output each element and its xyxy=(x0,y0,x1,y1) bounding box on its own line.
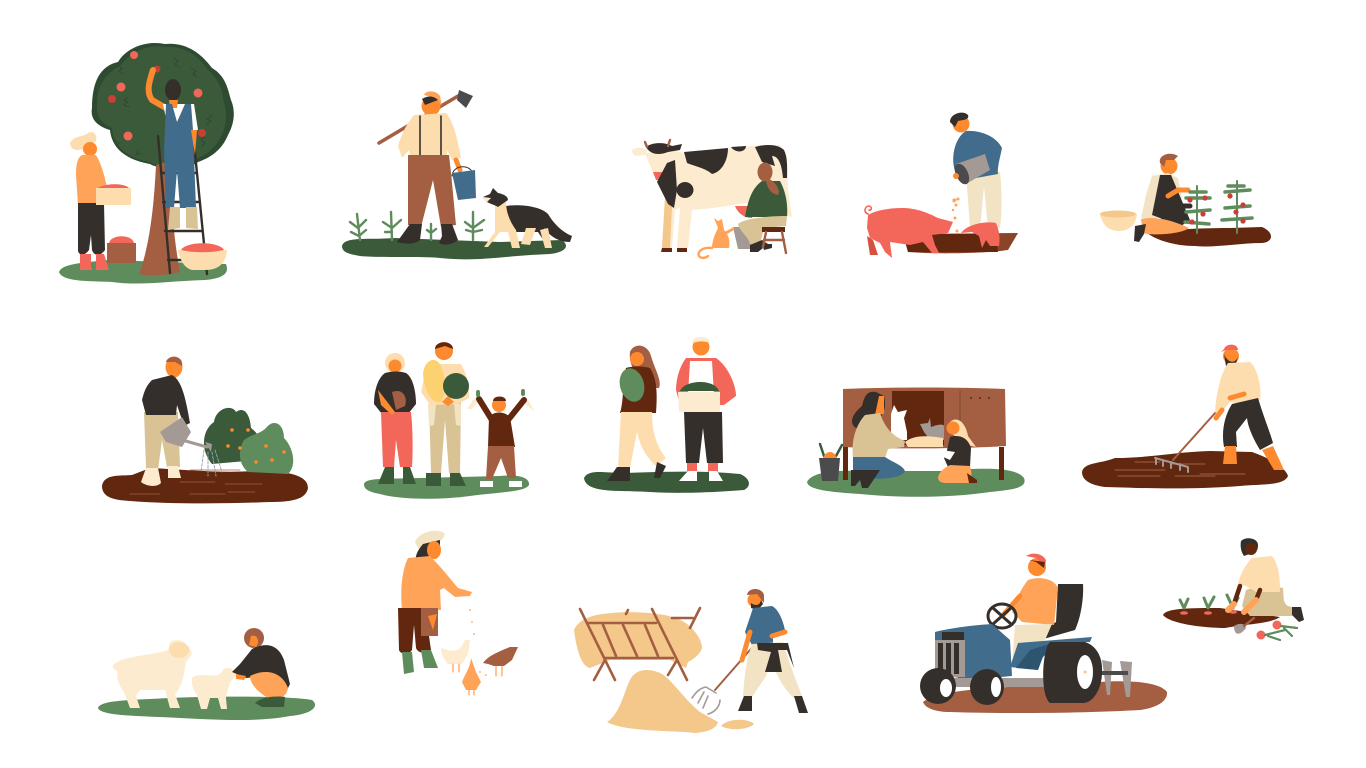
man with bucket xyxy=(950,113,1002,228)
ground xyxy=(98,697,315,720)
trough xyxy=(903,233,1018,253)
soil xyxy=(1146,227,1271,246)
watering can xyxy=(160,417,212,452)
tomato plants xyxy=(1185,181,1252,233)
soil xyxy=(102,468,308,503)
water streams xyxy=(201,450,222,476)
pitchfork xyxy=(692,687,720,714)
scene: apple picking xyxy=(59,43,234,284)
piglet xyxy=(961,222,1000,248)
scene: family with harvest xyxy=(364,342,535,499)
driver xyxy=(1004,554,1058,665)
seedlings xyxy=(130,470,262,494)
lamb xyxy=(192,668,238,709)
bush light xyxy=(240,423,293,474)
feed grains xyxy=(469,609,487,676)
hoe xyxy=(379,90,473,143)
gardener xyxy=(1134,154,1190,242)
hutch xyxy=(843,388,1006,480)
man xyxy=(676,337,736,481)
scene: planting radishes xyxy=(1163,538,1304,640)
cow body xyxy=(645,145,792,248)
girl xyxy=(938,420,977,483)
father xyxy=(421,342,469,486)
seedlings xyxy=(1180,595,1238,615)
scene: tomato gardener xyxy=(1100,154,1271,246)
scene: feeding chickens xyxy=(398,531,518,695)
woman xyxy=(607,346,666,481)
bucket with carrots xyxy=(819,444,842,481)
loose hay xyxy=(721,720,754,729)
scene: raking soil xyxy=(1082,345,1288,488)
udder xyxy=(735,206,758,218)
sheep xyxy=(113,640,192,708)
apple basket xyxy=(178,243,227,270)
hay rack xyxy=(580,608,700,680)
ladder xyxy=(158,136,207,274)
scene: sheep xyxy=(98,628,315,720)
grey rabbit xyxy=(920,418,944,440)
basket xyxy=(1100,210,1137,231)
child xyxy=(467,391,535,487)
falling feed xyxy=(952,198,960,232)
plants xyxy=(350,212,484,240)
ground xyxy=(807,469,1025,497)
soil xyxy=(923,681,1167,713)
cow head xyxy=(632,140,682,180)
trowel xyxy=(1234,618,1254,634)
orange hen xyxy=(462,658,481,695)
tree canopy xyxy=(92,43,234,169)
brown hen xyxy=(483,647,518,676)
tree trunk xyxy=(139,160,180,275)
mother xyxy=(374,353,416,484)
farmer xyxy=(738,589,808,713)
woman xyxy=(232,628,290,707)
ground xyxy=(364,475,529,499)
soil xyxy=(1163,608,1280,628)
woman xyxy=(851,392,905,488)
cat xyxy=(699,218,733,258)
farmer xyxy=(1215,345,1284,470)
radishes xyxy=(1256,620,1297,640)
apple crate xyxy=(107,236,136,263)
gardener xyxy=(141,356,190,486)
woman xyxy=(398,531,472,674)
white rabbit xyxy=(891,405,907,440)
farmer xyxy=(397,91,476,245)
scene: watering bushes xyxy=(102,356,308,503)
scene: hay and pitchfork xyxy=(574,589,808,733)
soil xyxy=(1082,451,1288,488)
scene: couple with harvest xyxy=(584,337,749,493)
cultivator xyxy=(1100,660,1132,697)
ground xyxy=(59,260,227,284)
milking woman xyxy=(738,162,787,252)
hay in rack xyxy=(574,612,702,668)
gardener xyxy=(1228,538,1304,622)
rake xyxy=(1155,458,1188,472)
milk bucket xyxy=(733,227,752,249)
ground xyxy=(342,238,566,259)
white hen xyxy=(441,640,470,672)
front wheel xyxy=(970,669,1004,705)
ground xyxy=(584,472,749,493)
scene: tractor xyxy=(920,554,1167,713)
scene: rabbit hutch xyxy=(807,388,1025,497)
tractor body xyxy=(935,624,1092,687)
man on ladder xyxy=(149,70,198,230)
dog xyxy=(483,188,572,248)
woman with crate xyxy=(70,132,131,270)
steering wheel xyxy=(988,604,1016,628)
cow patches xyxy=(657,145,787,208)
far front wheel xyxy=(920,668,956,704)
scene: milking cow xyxy=(632,140,792,258)
bush dark xyxy=(204,408,260,464)
scene: man with hoe and dog xyxy=(342,90,572,259)
pig xyxy=(865,206,953,258)
scene: feeding pigs xyxy=(865,113,1018,258)
hay xyxy=(905,436,943,447)
rear wheel xyxy=(1043,642,1102,703)
hay pile xyxy=(607,670,718,733)
stool xyxy=(762,227,786,253)
seat xyxy=(1030,584,1083,640)
rake handle xyxy=(1173,393,1233,460)
